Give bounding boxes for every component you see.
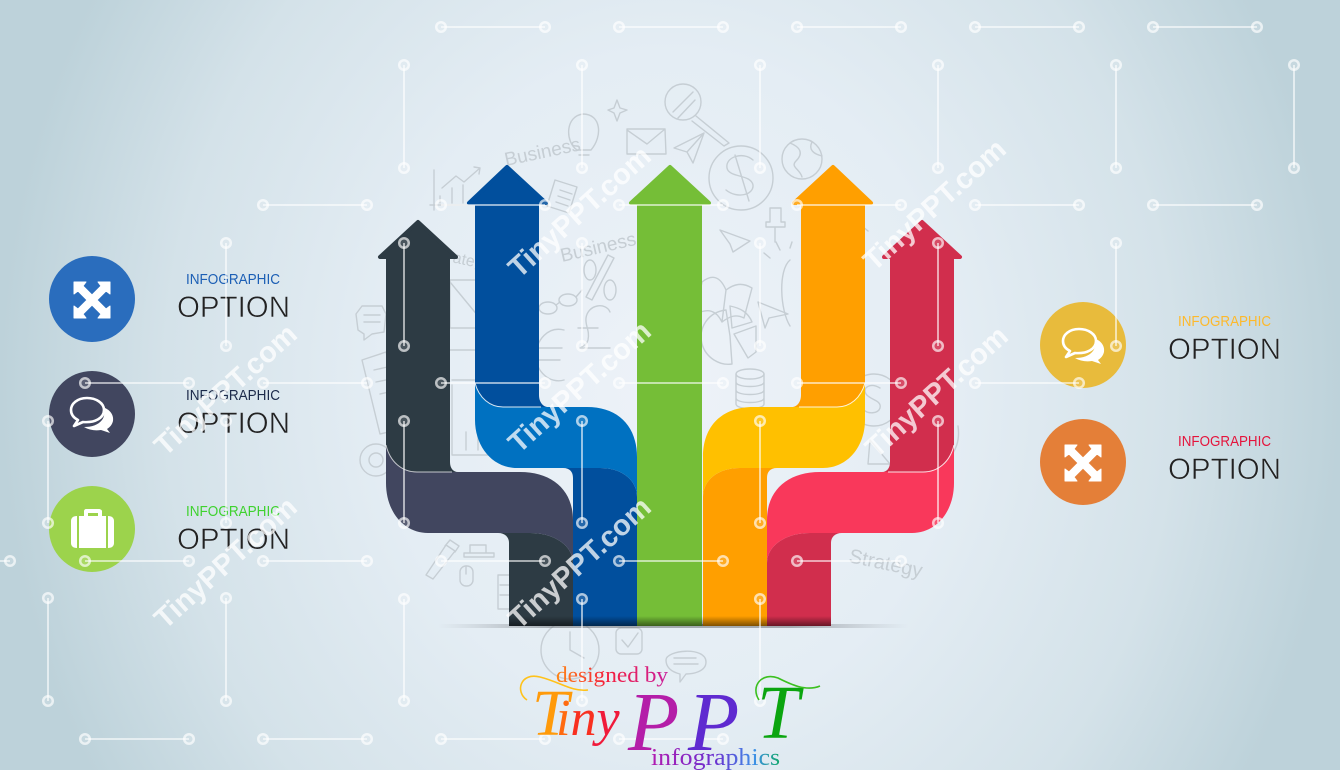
arrow: blue	[469, 167, 637, 626]
text: strategy doodle: Strategy	[847, 545, 924, 582]
arrow shaft: dark	[386, 256, 458, 472]
icon: paper plane doodle	[674, 133, 704, 163]
icon: leaf doodle	[868, 426, 959, 464]
icon: glasses doodle	[539, 290, 582, 314]
base shading on arrows	[509, 616, 831, 626]
icon: paper planes doodle	[720, 230, 788, 328]
icon: expand arrows	[74, 282, 110, 318]
label title: OPTION	[1168, 333, 1281, 366]
option label 3	[177, 503, 290, 556]
option label 5	[1168, 433, 1281, 486]
watermark 6: TinyPPT.com	[857, 133, 1013, 277]
band highlight: orange	[799, 383, 865, 407]
label title: OPTION	[1168, 453, 1281, 486]
icon: lamp doodle	[764, 226, 868, 326]
doodle illustration backdrop	[356, 84, 959, 682]
text: business doodle two: Business	[558, 229, 638, 267]
icon: laptop doodle	[450, 280, 492, 380]
arrow lower stem: dark	[498, 533, 573, 626]
band highlight: dark	[386, 445, 452, 472]
arrow: green	[631, 167, 709, 626]
watermarks	[148, 133, 1015, 635]
icon: check mark doodle	[616, 628, 642, 654]
text: strategy doodle left: Strategy	[431, 245, 493, 274]
logo: designed by: designed by	[556, 662, 668, 687]
label heading: INFOGRAPHIC	[1178, 433, 1271, 450]
icon: dollar coin small doodle	[848, 374, 900, 426]
icon: clock doodle	[541, 621, 599, 679]
watermark 4: TinyPPT.com	[148, 318, 304, 462]
icon: light bulb doodle	[569, 100, 627, 155]
icon circle: blue expand	[49, 256, 135, 342]
label heading: INFOGRAPHIC	[1178, 313, 1271, 330]
label heading: INFOGRAPHIC	[186, 503, 280, 520]
watermark 2: TinyPPT.com	[502, 315, 658, 459]
label heading: INFOGRAPHIC	[186, 271, 280, 288]
icon: growth chart doodle	[430, 167, 480, 210]
icon: dollar coin doodle	[709, 146, 773, 210]
icon circle: yellow chat	[1040, 302, 1126, 388]
icon: coin stack doodle	[736, 369, 764, 408]
band highlight: blue	[475, 383, 541, 407]
label title: OPTION	[177, 523, 290, 556]
arrow shaft: crimson	[882, 256, 954, 472]
arrow: orange	[703, 167, 871, 626]
icon: document doodle	[362, 352, 406, 434]
band highlight: crimson	[888, 445, 954, 472]
logo: Tiny PPT wordmark: P	[627, 676, 679, 769]
icon: open book doodle	[696, 277, 752, 322]
icon circle: green briefcase	[49, 486, 135, 572]
arrow head: dark	[380, 222, 456, 257]
icon: target doodle	[360, 444, 392, 476]
watermark 3: TinyPPT.com	[502, 491, 658, 635]
floor shadow	[438, 624, 908, 628]
arrow: crimson	[767, 222, 960, 626]
option label 4	[1168, 313, 1281, 366]
arrow lower stem: orange	[703, 468, 777, 626]
icon: bar chart doodle	[452, 385, 498, 455]
icon: percent doodle	[584, 255, 616, 300]
icon: speech bubble doodle	[356, 306, 386, 340]
logo: Tiny PPT wordmark: T	[757, 671, 804, 755]
logo: green swash	[756, 677, 820, 700]
watermark 1: TinyPPT.com	[502, 140, 658, 284]
text: business doodle one: Business	[503, 134, 582, 171]
arrow lower stem: crimson	[767, 533, 842, 626]
logo: Tiny PPT wordmark: P	[687, 676, 739, 769]
arrow lower stem: blue	[563, 468, 637, 626]
icon: chat bubbles	[71, 398, 113, 433]
arrow shaft: blue	[475, 202, 548, 407]
icon: pie chart doodle	[701, 306, 756, 364]
icon: briefcase	[71, 509, 114, 548]
label title: OPTION	[177, 407, 290, 440]
arrow head: crimson	[884, 222, 960, 257]
arrow band: blue	[475, 383, 637, 497]
icon: expand arrows	[1065, 445, 1101, 481]
icon: dollar stack doodle	[498, 575, 512, 609]
logo: Tiny PPT wordmark: ny	[570, 690, 620, 747]
watermark 7: TinyPPT.com	[859, 320, 1015, 464]
logo: Tiny PPT wordmark: i	[556, 690, 570, 747]
arrow: dark slate	[380, 222, 573, 626]
arrow head: blue	[469, 167, 546, 203]
icon: computer mouse doodle	[460, 545, 494, 586]
logo: swash decorations	[521, 676, 588, 700]
logo: Tiny PPT wordmark: T	[532, 677, 573, 750]
icon: envelope doodle	[627, 129, 666, 154]
arrow head: green	[631, 167, 709, 203]
arrow head: orange	[794, 167, 871, 203]
icon: globe doodle	[782, 139, 822, 179]
icon circle: navy chat	[49, 371, 135, 457]
icon: chat bubbles	[1063, 329, 1104, 364]
arrow band: dark	[386, 445, 573, 563]
arrow shaft: green	[637, 202, 702, 626]
icon: pushpin doodle	[766, 208, 785, 242]
label heading: INFOGRAPHIC	[186, 387, 280, 404]
icon: clipboard doodle	[547, 180, 577, 213]
arrow band: orange	[703, 383, 865, 497]
watermark 5: TinyPPT.com	[148, 491, 304, 635]
logo	[521, 662, 820, 770]
icon: pen doodle	[426, 540, 459, 579]
option label 1	[177, 271, 290, 324]
arrow band: crimson	[767, 445, 954, 563]
icon circle: orange expand	[1040, 419, 1126, 505]
option label 2	[177, 387, 290, 440]
label title: OPTION	[177, 291, 290, 324]
icon: magnifier doodle	[665, 84, 729, 146]
icon: chat doodle	[666, 651, 706, 682]
arrow shaft: orange	[792, 202, 865, 407]
icon: pound doodle	[578, 306, 610, 348]
icon: euro doodle	[534, 329, 564, 381]
